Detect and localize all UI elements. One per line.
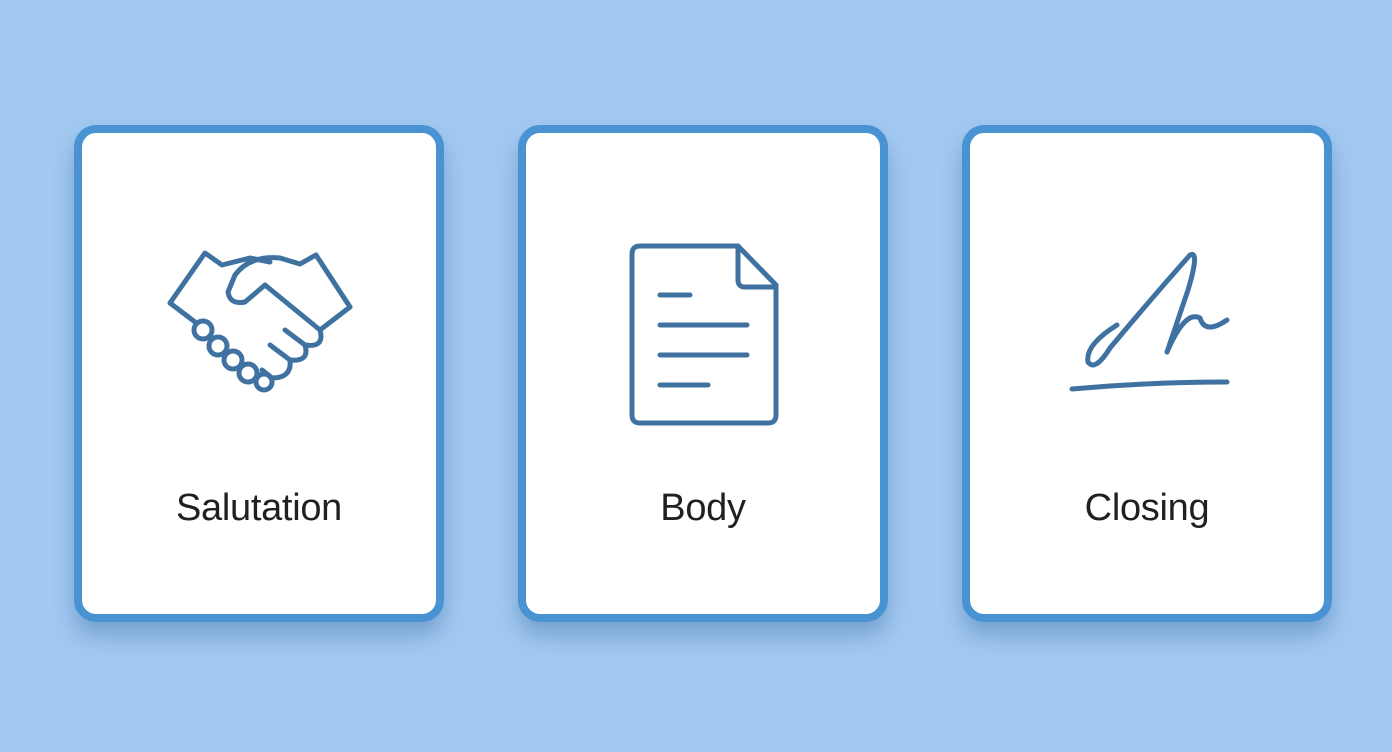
label: Salutation: Salutation <box>176 487 342 529</box>
card: body <box>518 125 888 622</box>
label: Closing: Closing <box>1085 487 1209 529</box>
icon: handshake <box>168 250 353 392</box>
label: Body: Body <box>660 487 746 529</box>
card: closing <box>962 125 1332 622</box>
icon: signature <box>1070 252 1230 392</box>
icon: document <box>630 244 778 426</box>
card: salutation <box>74 125 444 622</box>
